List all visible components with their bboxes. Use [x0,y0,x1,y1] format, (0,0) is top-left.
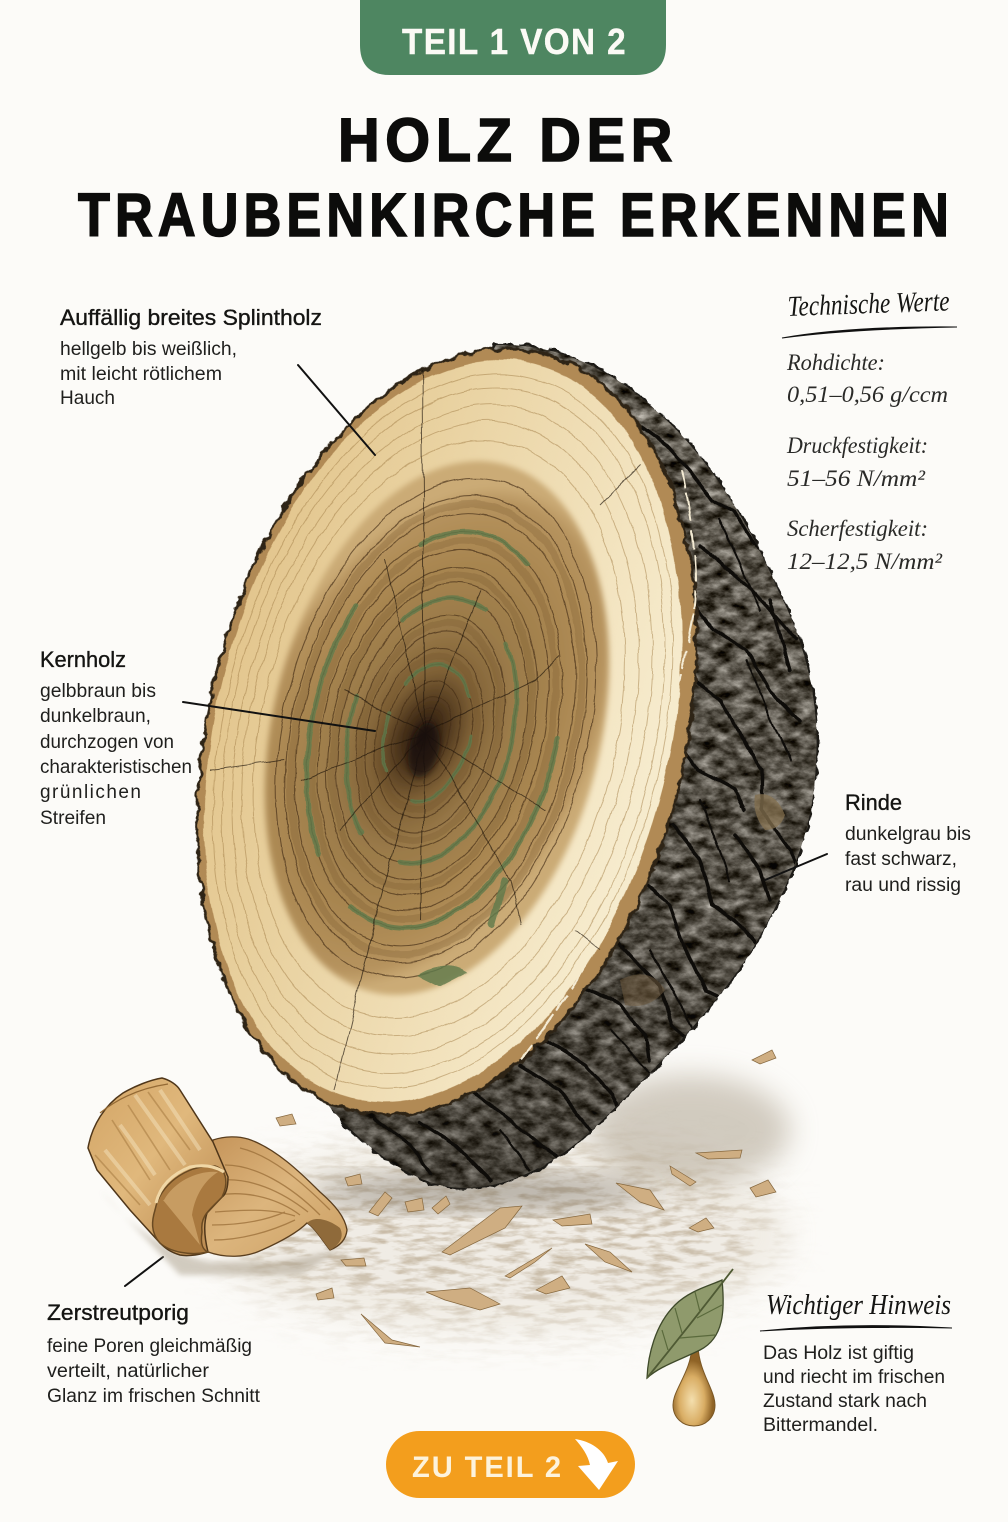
panel: important note [760,1289,952,1436]
callout lines [125,365,827,1286]
label: Splintholz: Hauch [60,388,115,409]
label: Zerstreutporig: Zerstreutporig [47,1300,189,1325]
label: Zerstreutporig: verteilt, natürlicher [47,1361,210,1382]
panel: important note: Bittermandel. [763,1415,878,1436]
label: Rinde: rau und rissig [845,875,961,896]
ribbon [200,1137,347,1256]
icon: arrow [575,1439,618,1490]
label: Rinde [845,790,971,896]
label: Splintholz [60,305,322,409]
sapwood rings [142,325,744,1137]
bark [328,342,820,1191]
panel: technical values: Rohdichte: [786,350,885,375]
label: Zerstreutporig: feine Poren gleichmäßig [47,1336,252,1357]
panel: technical values: 12–12,5 N/mm² [787,549,943,574]
panel: technical values: 51–56 N/mm² [787,466,926,491]
panel: technical values: 0,51–0,56 g/ccm [787,382,948,407]
label: Rinde: dunkelgrau bis [845,824,971,845]
banner: part label: TEIL 1 VON 2 [402,21,627,62]
label: Splintholz: hellgelb bis weißlich, [60,339,237,360]
wood chips [276,1050,776,1347]
icon: wood shaving [88,1078,347,1275]
label: Zerstreutporig: Glanz im frischen Schnitt [47,1386,261,1407]
button: to part 2: ZU TEIL 2 [412,1451,563,1484]
title [78,106,954,249]
illustration: cut log with bark [194,342,820,1191]
panel: technical values: Technische Werte [787,285,950,323]
sapwood [131,309,755,1153]
green streaks [267,504,601,985]
panel: important note: Das Holz ist giftig [763,1343,914,1364]
label: Rinde: Rinde [845,790,902,815]
cylinder [88,1078,228,1256]
label: Kernholz: grünlichen [40,782,141,803]
growth rings [227,445,645,1011]
medullary rays [210,370,640,1090]
banner: part label [360,0,666,75]
inner curl [153,1166,226,1254]
label: Kernholz: dunkelbraun, [40,706,151,727]
label: Zerstreutporig [47,1300,261,1407]
panel: important note: und riecht im frischen [763,1367,945,1388]
label: Splintholz: Auffällig breites Splintholz [60,305,322,330]
label: Rinde: fast schwarz, [845,849,957,870]
label: Kernholz: Kernholz [40,647,126,672]
label: Kernholz: gelbbraun bis [40,681,156,702]
ground with wood chips [210,1050,790,1347]
title: HOLZ DER [338,106,678,174]
dark pith [403,719,445,781]
label: Kernholz: charakteristischen [40,757,192,778]
bright rim highlight [520,470,696,1060]
button: to part 2 [386,1431,635,1498]
label: Kernholz: Streifen [40,808,106,829]
panel: technical values: Druckfestigkeit: [786,433,928,458]
label: Kernholz: durchzogen von [40,732,174,753]
icon: leaf with drop [647,1269,733,1426]
label: Kernholz [40,647,192,829]
cambium edge [122,296,772,1168]
heartwood [212,424,662,1032]
panel: technical values: Scherfestigkeit: [787,516,928,541]
panel: technical values [782,285,957,574]
panel: important note: Wichtiger Hinweis [766,1289,951,1321]
panel: important note: Zustand stark nach [763,1391,927,1412]
ring bands [246,472,626,986]
label: Splintholz: mit leicht rötlichem [60,364,222,385]
